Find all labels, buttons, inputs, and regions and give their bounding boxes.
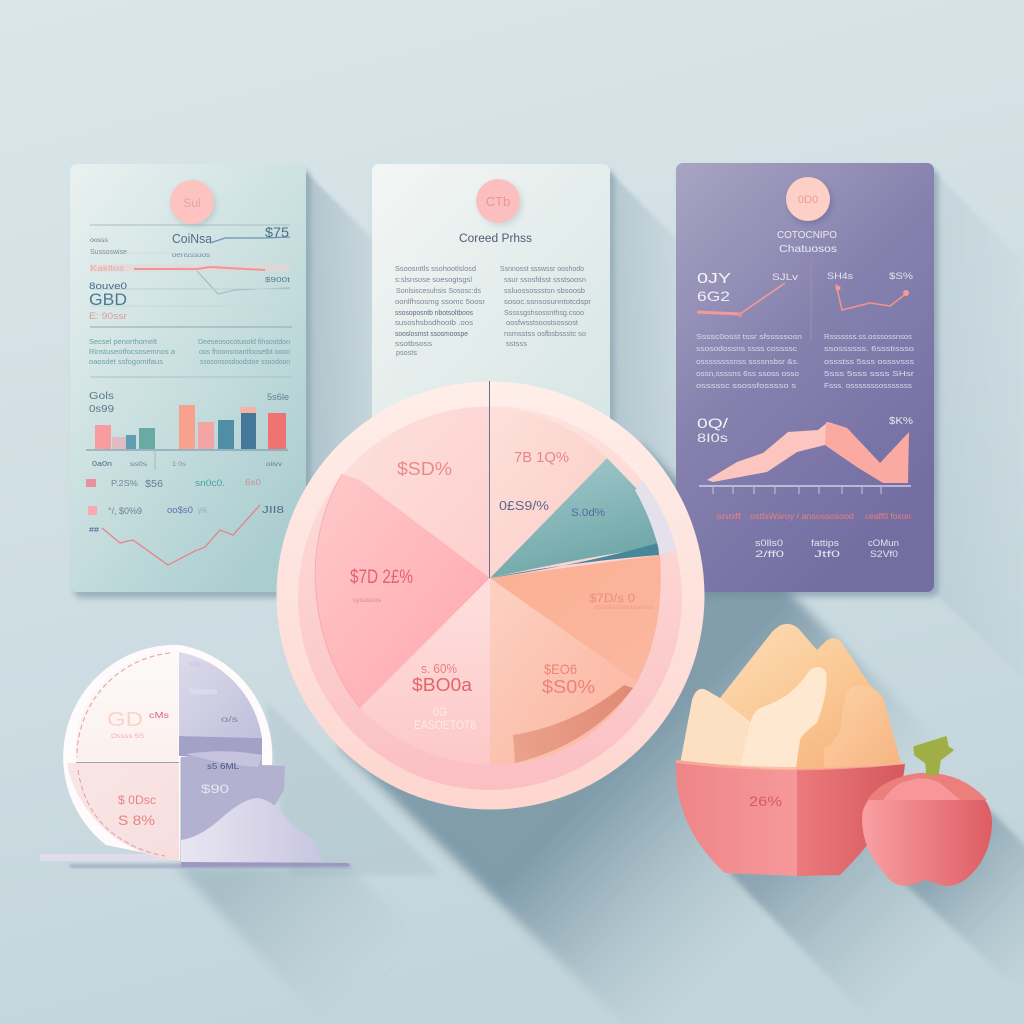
quarter pie chart: bottom left — [40, 645, 350, 868]
text block: Deeseosocotusold fihsostdon — [198, 339, 290, 346]
illustration: chips bowl — [676, 624, 992, 886]
line chart: left: SJLv — [772, 272, 799, 282]
pie labels: 7B 1Q% — [514, 449, 569, 466]
red labels: ceaff0 foxon — [865, 512, 911, 521]
icon: peach badge: 0D0 — [798, 194, 818, 206]
quarter labels: o/s — [221, 715, 238, 724]
line chart: left: 6G2 — [697, 288, 730, 304]
heading: CoiNsa — [172, 231, 213, 246]
line chart: left — [697, 270, 799, 317]
panel: middle text card — [372, 164, 614, 434]
heading: oensssoos — [172, 252, 211, 259]
text columns: ossssssssnss ssssnsbsr &s. — [696, 357, 799, 366]
slice: right — [490, 555, 661, 682]
stats text — [89, 237, 290, 321]
bowl — [676, 760, 905, 876]
pie labels: $BO0a — [412, 675, 473, 695]
arc edge on left slice — [315, 474, 360, 708]
text columns: sosoc.ssnsosunntotcdspr — [504, 299, 592, 306]
pie labels: $7D 2£% — [350, 567, 413, 588]
slice: bottom left — [360, 578, 490, 765]
text columns: Ssnnosst ssswssr ooshodo — [500, 266, 584, 273]
area chart: 8I0s — [697, 431, 728, 445]
legend: sn0c0. — [195, 478, 225, 488]
pie centre divider — [488, 381, 490, 578]
area chart: $K% — [889, 416, 913, 427]
bar chart: Gols — [89, 391, 114, 402]
divider — [810, 260, 812, 340]
pie labels: $S0% — [542, 677, 595, 697]
stats text: Sussoswise — [90, 249, 127, 256]
icon: apple — [862, 737, 992, 886]
slice: top left — [345, 407, 490, 578]
pie labels: sysosoos — [353, 598, 381, 604]
pie labels: sssssssoossoss — [595, 605, 653, 611]
bottom labels: 2/ff0 — [755, 549, 784, 559]
bar chart: ss0s — [130, 461, 148, 468]
icon: pink badge — [476, 179, 523, 226]
icon: peach badge — [786, 177, 832, 224]
bottom right quarter — [181, 752, 285, 860]
quarter labels: $90 — [201, 782, 229, 796]
heading: $75 — [265, 224, 289, 240]
text columns — [395, 266, 592, 357]
heading: COTOCNIPO — [777, 229, 837, 241]
bar chart: 5s6le — [267, 392, 289, 402]
heading — [90, 224, 290, 259]
pie labels: 0G — [433, 705, 447, 719]
text columns: Ssssc0osst tssr sfsssssosn — [696, 332, 802, 341]
quarter labels: GD — [107, 709, 143, 731]
line chart: top — [90, 237, 290, 306]
bottom labels: Jtf0 — [814, 549, 840, 559]
line chart: left: 0JY — [697, 270, 731, 287]
legend: y% — [198, 506, 207, 515]
stats text: Kakllos — [90, 264, 124, 273]
text columns: s:slsnsose soesogtsgsl — [395, 277, 472, 284]
line chart: bottom — [89, 505, 260, 565]
line chart: bottom: ## — [89, 527, 99, 534]
text block: Rinstuseotfocsosemnos a — [89, 349, 175, 356]
text columns: ssluossossstsn sbsoosb — [504, 288, 585, 295]
text columns: Sonlsiscesuhsis Sososc:ds — [396, 288, 481, 295]
quarter labels: Ossss 5S — [111, 733, 145, 740]
text columns: psosts — [396, 350, 418, 357]
panel: purple charts card — [676, 163, 938, 597]
bottom labels: cOMun — [868, 538, 899, 548]
text columns: osssssc ssossfosssso s — [696, 381, 796, 390]
bar chart: 1 0s — [172, 462, 186, 468]
legend: oo$s0 — [167, 505, 193, 515]
chips — [678, 624, 904, 775]
icon: pink badge: Sul — [183, 196, 201, 210]
divider lines — [76, 762, 179, 764]
heading: Chatuosos — [779, 243, 837, 255]
red labels: ostfsWaroy / ansossosood — [750, 512, 854, 521]
slice: top right — [490, 407, 607, 578]
panel: left report card — [70, 164, 310, 598]
bar chart: oiivv — [266, 462, 282, 468]
line chart: right: SH4s — [827, 271, 854, 281]
quarter labels: s5 6ML — [207, 762, 240, 771]
quarter labels: sss — [189, 661, 201, 668]
pie labels: S.0d% — [571, 507, 605, 519]
legend: JII8 — [262, 505, 285, 516]
text columns: ossstss 5sss osssvsss — [824, 357, 914, 366]
legend: 6s0 — [245, 478, 262, 487]
text columns: susoshsbsdhootb .oos — [395, 320, 474, 327]
darker band — [179, 736, 262, 756]
quarter labels — [107, 661, 240, 828]
pie labels — [350, 449, 653, 732]
bottom labels: fattips — [811, 538, 840, 548]
text columns: sstsss — [506, 341, 528, 348]
pie labels: $7D/s 0 — [589, 591, 635, 605]
bar chart: 0s99 — [89, 404, 115, 415]
quarter labels: cMs — [149, 711, 169, 720]
text columns: ossn,ssssns 6ss ssoss osso — [696, 369, 799, 378]
text columns: Ssoosnttls ssohootlslosd — [395, 266, 476, 273]
quarter labels: $ 0Dsc — [118, 793, 156, 807]
stats text: E: 90ssr — [89, 311, 127, 321]
bottom labels — [755, 538, 899, 559]
text columns: Rsssssss.ss.osssossnsos — [824, 332, 912, 341]
base strips — [40, 854, 350, 868]
legend: P.2S% — [111, 479, 138, 488]
pie labels: s. 60% — [421, 661, 457, 676]
top left quarter — [76, 650, 178, 762]
text columns: ssossssss. 6ssstissso — [824, 344, 914, 353]
slice: bottom right — [490, 578, 637, 765]
area chart — [697, 415, 913, 494]
dashed pink arc — [77, 653, 170, 856]
teal dark band — [490, 543, 659, 578]
pie labels: EASOETOT8 — [414, 718, 476, 732]
line chart: right — [827, 271, 913, 310]
top right quarter — [179, 652, 262, 738]
band highlight — [186, 751, 262, 767]
pie chart: main — [276, 381, 704, 810]
legend — [86, 478, 285, 516]
text block: oos fhoonsroantfoosetbt oooo — [199, 349, 290, 356]
stats text: $900t — [265, 277, 290, 284]
legend: $56 — [145, 479, 163, 490]
bottom labels: s0lls0 — [755, 538, 783, 548]
text block: ssosonsosdoodstoe ssoodoon — [200, 359, 290, 366]
legend: °/, $0%9 — [108, 506, 142, 516]
quarter labels: S 8% — [118, 812, 155, 828]
text block: Secsel penorthomelt — [89, 339, 157, 346]
text columns: ssotbsoss — [395, 341, 433, 348]
text block: oaosdet ssfogomtfaus — [89, 359, 164, 366]
bar chart: 0a0n — [92, 461, 112, 468]
pie labels: $SD% — [397, 459, 452, 479]
text columns: ssosoposntb nbotsoltboos — [395, 310, 473, 317]
red labels — [716, 512, 911, 521]
text columns: Fsss. osssssssosssssss — [824, 381, 912, 390]
line chart: right: $S% — [889, 271, 913, 281]
text columns: oosfwsstsoostsossost — [506, 320, 578, 327]
text columns: ssosodossns ssss cossssc — [696, 344, 797, 353]
text columns — [696, 332, 915, 390]
mountain — [181, 798, 323, 862]
bowl label: 26% — [749, 793, 782, 809]
quarter labels: Sssssss — [189, 687, 217, 696]
red labels: snoff — [716, 512, 742, 521]
text columns: sooslosmst ssosmoospe — [395, 331, 468, 338]
long shadows — [175, 172, 1024, 1024]
darker band — [513, 685, 633, 763]
stats text: GBD — [89, 290, 127, 309]
lavender arc segment — [635, 481, 677, 554]
pie labels: 0£S9/% — [499, 498, 549, 513]
heading — [777, 229, 837, 255]
bottom labels: S2Vf0 — [870, 549, 898, 559]
icon: pink badge — [170, 180, 216, 227]
bar chart — [86, 391, 289, 470]
text columns: nsmsstss osfbsbssstc so — [504, 331, 586, 338]
text columns: Sssssgshsossnthsg.csoo — [504, 310, 584, 317]
stats text: 8ouve0 — [89, 281, 127, 291]
bottom left quarter — [67, 763, 179, 861]
text columns: ssur ssosfdsst ssstsoosn — [504, 277, 586, 284]
slice: left — [315, 474, 490, 708]
area chart: 0Q/ — [697, 415, 728, 431]
icon: pink badge: CTb — [486, 194, 510, 209]
text block — [89, 327, 292, 377]
pie labels: $EO6 — [544, 661, 577, 677]
text columns: 5sss 5sss ssss SHsr — [824, 369, 915, 378]
slice: teal — [490, 458, 658, 578]
stats text: oosss — [90, 237, 109, 244]
text columns: oonlfhsosmg ssomc 5oosr — [395, 299, 486, 306]
heading: Coreed Prhss — [459, 233, 532, 245]
white ring — [63, 645, 272, 860]
